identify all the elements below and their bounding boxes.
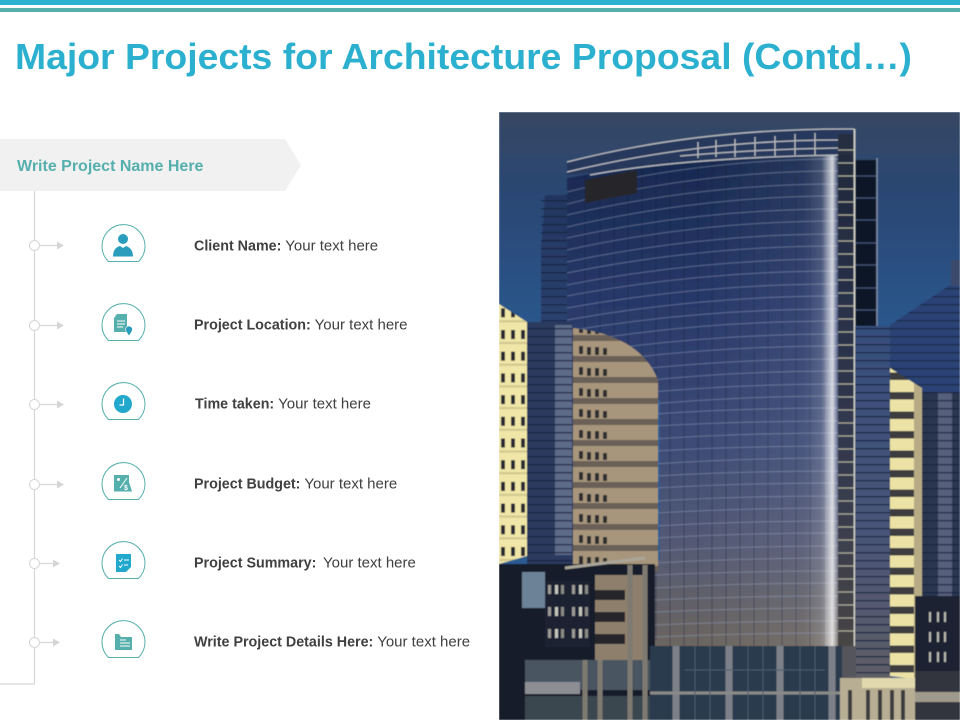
label: Your text here — [323, 554, 416, 572]
icon: document with pin — [102, 304, 145, 340]
left wing of tower — [541, 195, 575, 330]
building photograph — [499, 112, 960, 720]
left cream building — [499, 304, 527, 564]
timeline marker — [30, 400, 64, 410]
top accent bars — [0, 0, 960, 12]
timeline marker — [30, 320, 64, 330]
timeline spine — [0, 191, 34, 684]
roof opening — [585, 170, 637, 203]
roof frame — [567, 129, 854, 175]
icon: folder document — [102, 621, 145, 658]
left blue connector — [527, 322, 573, 572]
project name banner — [0, 139, 301, 191]
tower mullions — [585, 155, 824, 646]
main tower glass — [567, 155, 854, 646]
timeline marker — [30, 480, 64, 490]
podium — [650, 646, 842, 720]
timeline marker — [30, 240, 64, 250]
row: time taken — [30, 383, 371, 420]
row: project details — [30, 621, 470, 658]
far right dark tower — [922, 392, 960, 600]
tower floor lines — [567, 159, 838, 637]
service ladder — [838, 129, 854, 646]
right rear tower — [890, 260, 960, 400]
tower highlight — [700, 155, 838, 646]
sky — [499, 112, 960, 720]
icon: budget percent: $ — [124, 485, 128, 492]
timeline marker — [30, 638, 60, 648]
roof frame backing — [567, 129, 854, 175]
rear dark core — [850, 158, 877, 330]
row: project location — [30, 304, 408, 340]
label: Client Name: Your text here — [194, 238, 378, 254]
lower right entrance — [840, 678, 915, 720]
lower right block — [915, 596, 960, 720]
icon: client person — [102, 225, 145, 262]
icon: checklist — [102, 542, 145, 578]
icon: clock — [102, 383, 145, 420]
label: Write Project Details Here: Your text here — [194, 634, 470, 650]
lower left block — [499, 558, 655, 720]
label: Project Summary: — [194, 556, 316, 572]
label: Project Budget: Your text here — [194, 476, 397, 492]
beige cylinder building — [573, 328, 658, 572]
label: Project Location: Your text here — [194, 316, 408, 334]
project name banner: Write Project Name Here — [17, 158, 204, 175]
row: client name — [30, 225, 378, 262]
timeline marker — [30, 558, 60, 568]
title: Major Projects for Architecture Proposal (Contd…) — [15, 36, 912, 77]
row: project budget — [30, 463, 397, 500]
right blue block — [842, 326, 891, 678]
row: project summary — [30, 542, 416, 578]
right cream building — [890, 368, 922, 680]
icon: budget percent — [102, 463, 145, 500]
label: Time taken: Your text here — [195, 396, 371, 412]
